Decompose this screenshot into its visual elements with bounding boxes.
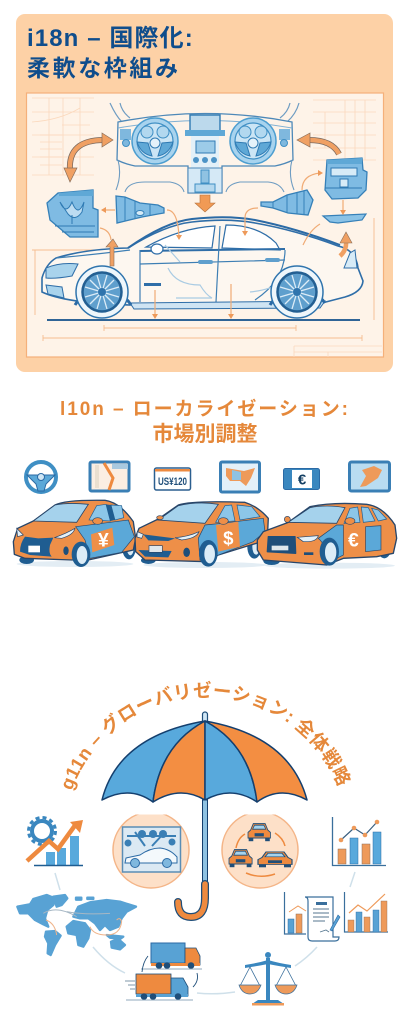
panel: i18n <box>16 14 393 372</box>
car: euro <box>257 503 397 569</box>
icon: scales <box>239 952 297 1006</box>
heading: i18n: i18n – 国際化: <box>27 25 194 52</box>
icon: USA map display <box>220 462 260 492</box>
heading: g11n arc: g11n – グローバリゼーション: 全体戦略 <box>64 680 351 790</box>
icon: oil pan <box>323 214 366 223</box>
orange arrows <box>64 133 352 319</box>
heading: flexible framework: 柔軟な枠組み <box>27 55 181 81</box>
icon: right transmission <box>261 190 313 215</box>
icon: euro card: € <box>298 472 307 488</box>
circle: three cars cycle <box>222 811 298 888</box>
connecting arcs <box>55 872 355 994</box>
dashboard <box>110 103 299 193</box>
blueprint sheet <box>26 93 384 357</box>
car: dollar: $ <box>223 527 234 548</box>
icon: license plate: US¥120 <box>158 476 187 488</box>
heading: l10n: l10n – ローカライゼーション: <box>60 397 348 420</box>
icon: navigation display <box>90 462 129 491</box>
icon: gear and growth arrow <box>27 818 83 866</box>
icon: contract with charts <box>284 892 388 941</box>
icon: license plate <box>154 468 190 490</box>
heading: market adjustment: 市場別調整 <box>152 423 258 446</box>
icon: world map <box>17 895 136 955</box>
car blueprint <box>42 217 363 320</box>
icon: left transmission <box>116 196 164 223</box>
icon: euro card <box>284 468 320 490</box>
icon: line and bar chart <box>332 817 386 866</box>
icon: trucks <box>125 943 202 1000</box>
icon: steering wheel <box>26 462 56 492</box>
umbrella <box>102 712 307 917</box>
car: yen <box>13 500 136 567</box>
car: dollar <box>135 502 268 568</box>
circle: blueprint thumbnail <box>113 811 189 888</box>
car: yen: ¥ <box>98 530 109 551</box>
icon: left engine <box>47 190 98 237</box>
icon: right engine <box>325 158 367 199</box>
icon: Europe map display <box>350 462 390 491</box>
car: euro: € <box>348 531 359 552</box>
